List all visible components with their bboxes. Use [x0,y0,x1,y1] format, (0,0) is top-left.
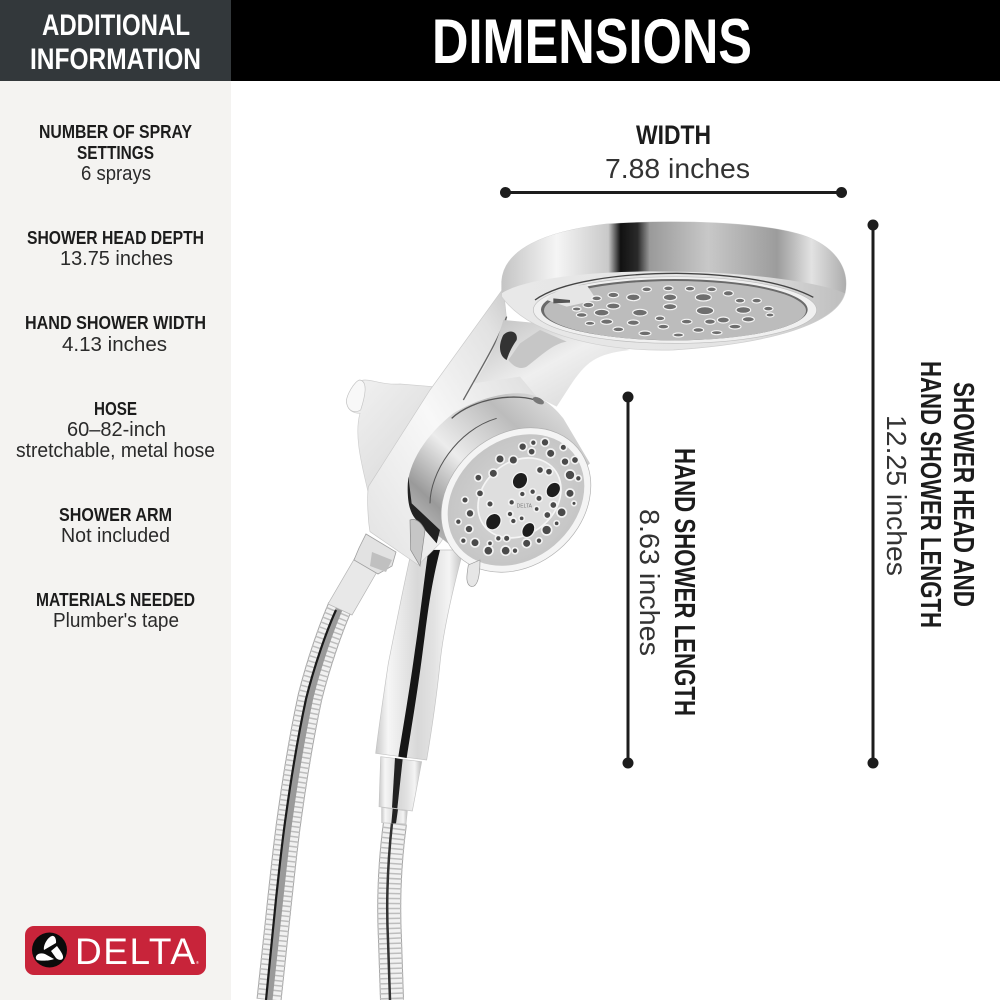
info: materials needed: MATERIALS NEEDED [36,590,195,610]
heading: dimensions banner [231,0,1000,81]
dimension: hand shower length: 8.63 inches [634,509,665,656]
logo: Delta: ® [196,960,199,965]
large hand shower jets [482,469,564,540]
dimension: hand shower length [622,392,700,768]
info: hand shower width: HAND SHOWER WIDTH [25,313,206,333]
heading: additional information: INFORMATION [30,43,201,76]
info: hose [16,399,215,462]
info: materials needed [36,590,195,632]
logo: Delta [25,926,206,975]
info: hose: HOSE [94,399,137,419]
arm [368,288,540,565]
dimension: width: WIDTH [636,120,711,150]
info: shower head depth [27,228,204,270]
release tabs [410,519,480,587]
info: shower head depth: 13.75 inches [60,248,173,270]
info: materials needed: Plumber's tape [53,610,179,632]
neck [473,320,630,407]
info: number of spray settings: NUMBER OF SPRAY [39,122,192,142]
info: number of spray settings [39,122,192,185]
dimension: shower head and hand shower length: 12.25 inches [881,415,912,576]
dimension: shower head and hand shower length: SHOWER HEAD AND [947,382,979,607]
logo: Delta: DELTA [75,931,195,972]
overhead head nozzles [572,286,774,337]
hose nut connector [354,534,396,574]
panel: additional information sidebar [0,0,231,1000]
info: hose: stretchable, metal hose [16,440,215,462]
dimension: shower head and hand shower length [868,220,979,768]
heading: additional information: ADDITIONAL [42,9,190,42]
hose to hand shower [387,823,395,1000]
dimension: hand shower length: HAND SHOWER LENGTH [668,448,700,716]
dimension: width: 7.88 inches [605,153,750,184]
hose to wall mount [266,607,340,1000]
info: hand shower width [25,313,206,356]
hand shower nozzles [455,438,581,555]
overhead shower head [502,222,846,350]
heading: dimensions banner: DIMENSIONS [432,7,752,77]
handle [376,550,463,824]
hand shower body [408,393,590,563]
info: shower arm: Not included [61,525,170,547]
info: shower arm: SHOWER ARM [59,505,172,525]
wall connector nub [346,380,450,497]
info: number of spray settings: 6 sprays [81,163,151,185]
info: hand shower width: 4.13 inches [62,334,167,356]
info: hose: 60–82-inch [67,419,166,441]
hand shower face [412,398,620,602]
illustration: dual shower head product [266,222,846,1000]
info: number of spray settings: SETTINGS [77,143,154,163]
info: shower head depth: SHOWER HEAD DEPTH [27,228,204,248]
hose smooth collar [328,556,378,615]
dimension: shower head and hand shower length: HAND SHOWER LENGTH [914,361,946,628]
heading: additional information [0,0,231,81]
brand mark on face: DELTA [517,504,532,510]
dimension: width [500,120,847,198]
info: shower arm [59,505,172,547]
